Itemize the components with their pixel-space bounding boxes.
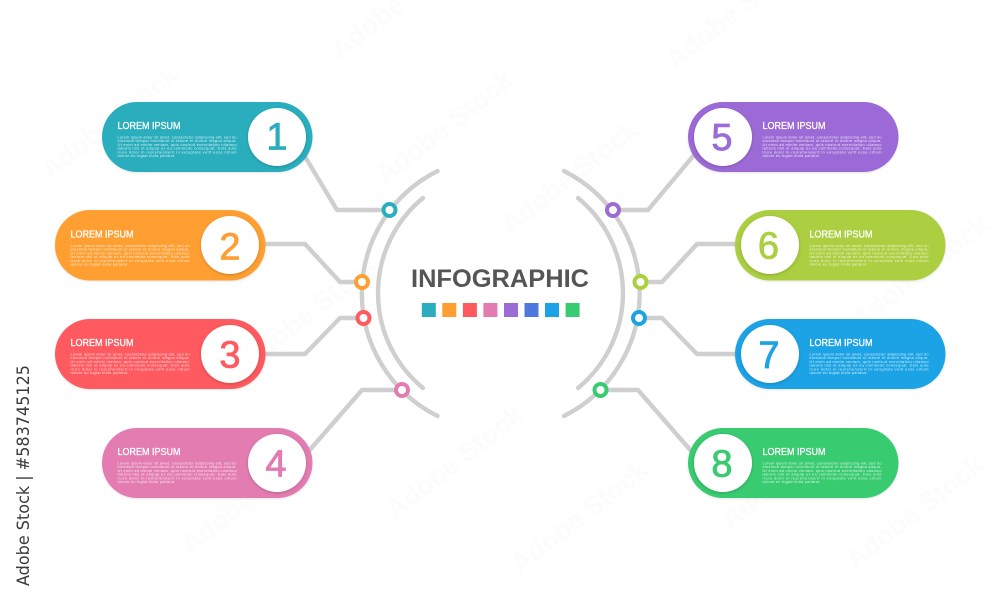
panel 1: dolore eu fugiat nulla pariatur. xyxy=(118,153,176,158)
panel 5: 5 xyxy=(711,117,733,159)
connector dots xyxy=(356,204,646,396)
panel 4: 4 xyxy=(265,444,287,486)
panel 1: 1 xyxy=(266,116,288,158)
panel 7: dolore eu fugiat nulla pariatur. xyxy=(810,370,868,375)
panel 3: Lorem ipsum dolor sit amet, consectetur adipiscing elit, sed do xyxy=(70,352,190,356)
panel 4 xyxy=(102,428,312,498)
panel 5: laboris nisi ut aliquip ex ea commodo consequat. Duis aute xyxy=(762,146,882,151)
panel 1: eiusmod tempor incididunt ut labore et dolore magna aliqua. xyxy=(118,138,236,143)
panel 6 xyxy=(735,210,946,280)
panel 8: eiusmod tempor incididunt ut labore et dolore magna aliqua. xyxy=(762,464,882,469)
watermark pattern: Adobe Stock xyxy=(380,399,530,525)
panel 7: eiusmod tempor incididunt ut labore et dolore magna aliqua. xyxy=(810,355,928,360)
panel 4: irure dolor in reprehenderit in voluptate velit esse cillum xyxy=(118,475,236,480)
color swatches xyxy=(422,303,580,317)
panel 2: irure dolor in reprehenderit in voluptate velit esse cillum xyxy=(70,258,190,263)
panel 5: dolore eu fugiat nulla pariatur. xyxy=(762,153,820,158)
panel 1 xyxy=(102,102,312,172)
panel 2: eiusmod tempor incididunt ut labore et dolore magna aliqua. xyxy=(70,247,190,252)
panel 7: 7 xyxy=(758,335,780,377)
panel 8: LOREM IPSUM xyxy=(762,447,826,458)
panel 2 xyxy=(55,210,266,280)
panel 8 xyxy=(688,428,898,498)
watermark pattern: Adobe Stock xyxy=(175,434,325,560)
panel 8: dolore eu fugiat nulla pariatur. xyxy=(762,479,820,484)
watermark pattern: Adobe Stock xyxy=(370,64,520,190)
panel 2: Lorem ipsum dolor sit amet, consectetur adipiscing elit, sed do xyxy=(70,243,190,248)
panel 1: LOREM IPSUM xyxy=(118,121,180,132)
panel 4: Lorem ipsum dolor sit amet, consectetur adipiscing elit, sed do xyxy=(118,460,236,466)
panel 7: laboris nisi ut aliquip ex ea commodo consequat. Duis aute xyxy=(810,363,928,368)
panel 3: LOREM IPSUM xyxy=(70,338,134,349)
panel 8: Lorem ipsum dolor sit amet, consectetur adipiscing elit, sed do xyxy=(762,460,882,466)
watermark pattern: Adobe Stock xyxy=(845,209,995,335)
panel 1: Ut enim ad minim veniam, quis nostrud exercitation ullamco xyxy=(118,142,236,147)
title: INFOGRAPHIC xyxy=(411,265,589,293)
watermark pattern: Adobe Stock xyxy=(495,114,645,240)
panel 1: Lorem ipsum dolor sit amet, consectetur adipiscing elit, sed do xyxy=(118,134,236,140)
panel 4: LOREM IPSUM xyxy=(118,447,180,458)
panel 3: dolore eu fugiat nulla pariatur. xyxy=(70,370,128,375)
panel 4: dolore eu fugiat nulla pariatur. xyxy=(118,479,176,484)
panel 7: Lorem ipsum dolor sit amet, consectetur adipiscing elit, sed do xyxy=(810,352,928,356)
panel 8: 8 xyxy=(711,444,733,486)
panel 3: laboris nisi ut aliquip ex ea commodo consequat. Duis aute xyxy=(70,363,190,368)
panel 4: eiusmod tempor incididunt ut labore et dolore magna aliqua. xyxy=(118,464,236,469)
panel 5: LOREM IPSUM xyxy=(762,121,826,132)
panel 4: laboris nisi ut aliquip ex ea commodo consequat. Duis aute xyxy=(118,472,236,477)
panel 2: dolore eu fugiat nulla pariatur. xyxy=(70,262,128,266)
panel 5: Ut enim ad minim veniam, quis nostrud exercitation ullamco xyxy=(762,142,882,147)
watermark pattern: Adobe Stock xyxy=(35,59,185,185)
stock id side label: Adobe Stock | #583745125 xyxy=(14,365,34,586)
panel 3: Ut enim ad minim veniam, quis nostrud exercitation ullamco xyxy=(70,359,190,364)
panel 6: laboris nisi ut aliquip ex ea commodo consequat. Duis aute xyxy=(810,254,928,259)
panel 6: eiusmod tempor incididunt ut labore et dolore magna aliqua. xyxy=(810,247,928,252)
panel 8: Ut enim ad minim veniam, quis nostrud exercitation ullamco xyxy=(762,468,882,473)
watermark pattern: Adobe Stock xyxy=(235,249,385,375)
panel 7: irure dolor in reprehenderit in voluptate velit esse cillum xyxy=(810,366,928,371)
panel 2: 2 xyxy=(219,226,241,268)
panel 5: irure dolor in reprehenderit in voluptate velit esse cillum xyxy=(762,149,882,154)
panel 5 xyxy=(688,102,898,172)
watermark pattern: Adobe Stock xyxy=(715,409,865,535)
central arcs and connector lines xyxy=(262,155,738,452)
panel 2: laboris nisi ut aliquip ex ea commodo consequat. Duis aute xyxy=(70,254,190,259)
panel 1: irure dolor in reprehenderit in voluptate velit esse cillum xyxy=(118,149,236,154)
panel 8: irure dolor in reprehenderit in voluptate velit esse cillum xyxy=(762,475,882,480)
panel 6: Ut enim ad minim veniam, quis nostrud exercitation ullamco xyxy=(810,250,928,255)
panel 6: Lorem ipsum dolor sit amet, consectetur adipiscing elit, sed do xyxy=(810,243,928,248)
panel 3: eiusmod tempor incididunt ut labore et dolore magna aliqua. xyxy=(70,355,190,360)
panel 1: laboris nisi ut aliquip ex ea commodo consequat. Duis aute xyxy=(118,146,236,151)
panel 6: LOREM IPSUM xyxy=(810,230,872,240)
panel 3: 3 xyxy=(219,334,241,376)
panel 4: Ut enim ad minim veniam, quis nostrud exercitation ullamco xyxy=(118,468,236,473)
panel 7: LOREM IPSUM xyxy=(810,338,872,349)
panel 5: Lorem ipsum dolor sit amet, consectetur adipiscing elit, sed do xyxy=(762,134,882,140)
panel 5: eiusmod tempor incididunt ut labore et dolore magna aliqua. xyxy=(762,138,882,143)
panel 6: dolore eu fugiat nulla pariatur. xyxy=(810,262,868,266)
panel 7: Ut enim ad minim veniam, quis nostrud exercitation ullamco xyxy=(810,359,928,364)
watermark pattern: Adobe Stock xyxy=(840,449,990,575)
panel 3: irure dolor in reprehenderit in voluptate velit esse cillum xyxy=(70,366,190,371)
panel 6: 6 xyxy=(758,226,779,268)
panel 8: laboris nisi ut aliquip ex ea commodo consequat. Duis aute xyxy=(762,472,882,477)
panel 3 xyxy=(55,319,266,389)
panel 7 xyxy=(735,319,946,389)
watermark pattern: Adobe Stock xyxy=(505,454,655,580)
panel 2: LOREM IPSUM xyxy=(70,230,134,240)
panel 2: Ut enim ad minim veniam, quis nostrud exercitation ullamco xyxy=(70,250,190,255)
panel 6: irure dolor in reprehenderit in voluptate velit esse cillum xyxy=(810,258,928,263)
